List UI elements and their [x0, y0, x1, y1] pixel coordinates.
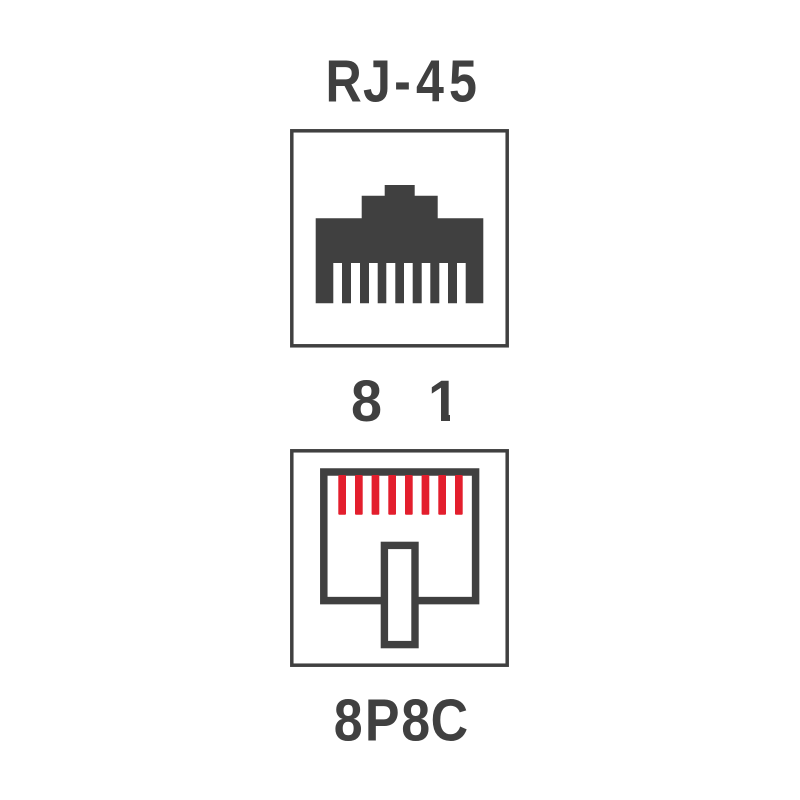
infographic: RJ-45 socket and 8P8C plug: [290, 60, 509, 741]
icon: plug body: [324, 472, 476, 601]
panel: 8P8C plug: [292, 451, 507, 665]
pin label: 1: 1: [428, 369, 459, 434]
title: RJ-45: RJ-45: [326, 48, 477, 114]
panel frame: socket: [292, 131, 507, 346]
panel: RJ-45 socket: [292, 131, 507, 346]
icon: socket silhouette: [316, 185, 483, 303]
label: 8P8C: 8P8C: [334, 687, 468, 753]
pin label: 8: 8: [351, 369, 382, 434]
icon: plug latch tab: [384, 545, 415, 645]
panel frame: plug: [292, 451, 507, 665]
icon: red contact pins: [338, 475, 463, 515]
